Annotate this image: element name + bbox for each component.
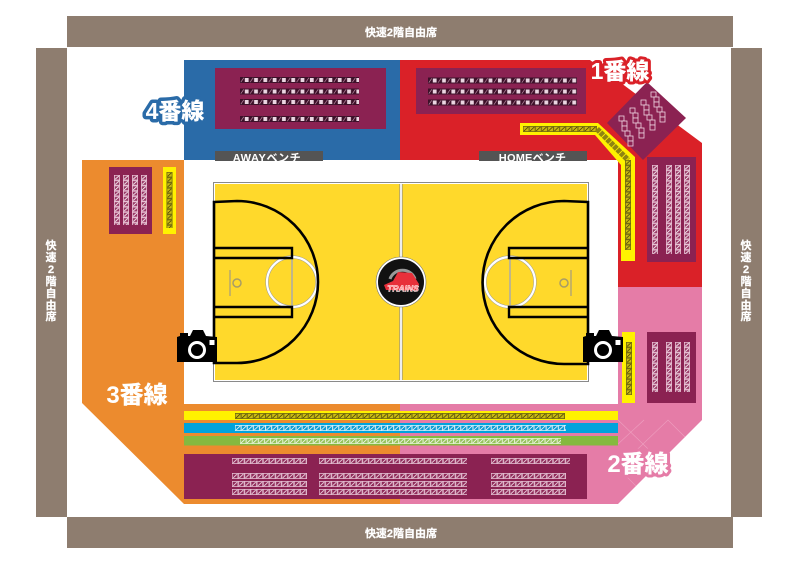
seat block: bottom [184,454,587,499]
right half lines [483,201,588,364]
band: right 2F free seating [731,48,762,517]
bench label: away: AWAYベンチ [233,152,301,164]
icon: camera right [583,330,623,362]
band: top 2F free seating: 快速2階自由席 [365,25,437,39]
seat strip: yellow baseline row [184,411,618,420]
zone: red line 1 [400,60,702,287]
icon: camera left [177,330,217,362]
bench label: home: HOMEベンチ [499,152,566,164]
zone: pink line 2 [400,287,702,504]
seat block: red zone top [416,68,586,114]
band: left 2F free seating [36,48,67,517]
seat block: blue zone [215,68,386,129]
label: line 3: 3番線 [106,382,168,409]
seat strip: blue baseline row [184,423,618,433]
center logo: TRAINS [387,284,419,294]
label: line 2: 2番線 [607,451,669,478]
seat block: orange zone [109,167,152,234]
band: right 2F free seating: 快速2階自由席 [740,238,752,323]
band: top 2F free seating [67,16,733,47]
center logo [376,257,426,307]
seat strip: green baseline row [184,436,618,446]
seat strip: yellow orange zone [163,167,176,234]
zone: blue line 4 [184,60,400,160]
label: line 1: 1番線 [591,58,649,84]
seat block: pink zone right [647,332,696,403]
seat strip: yellow pink zone [622,332,635,403]
left half lines [214,201,318,363]
seat strip: yellow L-shaped red zone [520,123,635,261]
band: bottom 2F free seating [67,517,733,548]
zone: orange line 3 [82,160,400,504]
bench label: away [215,151,323,164]
label: line 4: 4番線 [146,98,204,124]
basketball court [214,182,588,382]
seat block: red zone right [647,157,696,262]
bench label: home [479,151,587,164]
band: bottom 2F free seating: 快速2階自由席 [365,526,437,540]
band: left 2F free seating: 快速2階自由席 [46,238,56,323]
seat block: diamond corner [607,82,686,160]
